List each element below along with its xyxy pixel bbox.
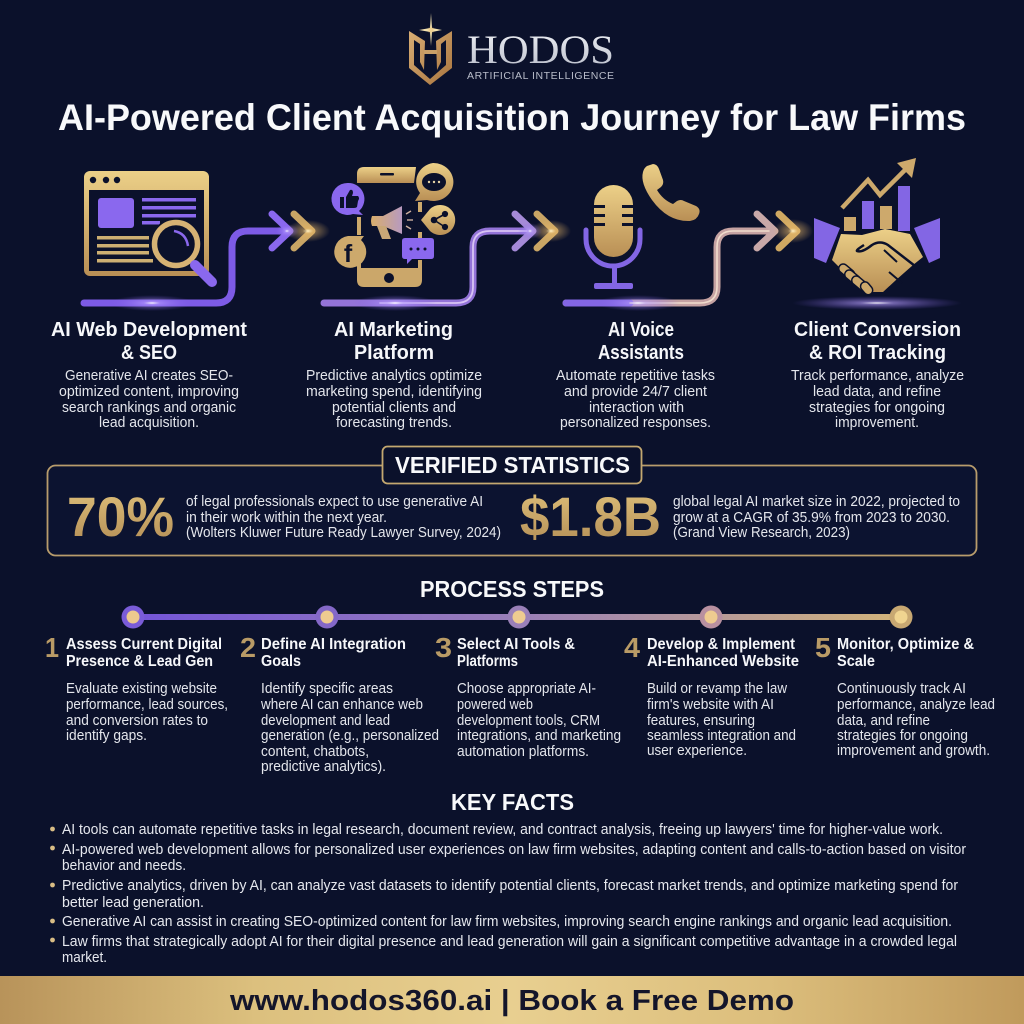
column 3 text: and provide 24/7 client: [564, 384, 707, 400]
step 4: [624, 632, 799, 759]
step 1: Evaluate existing website: [66, 681, 217, 697]
step 2: [240, 632, 439, 775]
stat $1.8B description: global legal AI market size in 2022, projected to: [673, 494, 960, 510]
icon: chat bubble: [415, 163, 453, 201]
step 2: Goals: [261, 653, 301, 670]
key facts list: market.: [62, 949, 107, 966]
step 5: improvement and growth.: [837, 743, 990, 759]
icon: handshake with growth chart: [792, 158, 962, 310]
icon: phone with social bubbles: [331, 163, 455, 287]
arrow 3: [566, 214, 813, 311]
footer banner: www.hodos360.ai | Book a Free Demo: [229, 985, 794, 1017]
step 1: Assess Current Digital: [66, 636, 222, 653]
footer banner: [0, 976, 1024, 1024]
step 2: content, chatbots,: [261, 744, 369, 760]
step 3: Select AI Tools &: [457, 636, 575, 653]
column 3 text: [556, 319, 715, 431]
panel: verified statistics: [48, 446, 976, 556]
logo wordmark: HODOS: [467, 27, 614, 72]
stat 70% description: in their work within the next year.: [186, 510, 387, 526]
step 1: identify gaps.: [66, 728, 147, 744]
stat $1.8B description: (Grand View Research, 2023): [673, 525, 850, 541]
key facts list: AI-powered web development allows for personalized user experiences on law firm websites, adapting content and calls-to-action based on visitor: [62, 841, 966, 858]
heading: key facts: KEY FACTS: [451, 789, 574, 815]
column 3 text: personalized responses.: [560, 415, 711, 431]
column 2 text: Platform: [354, 342, 434, 364]
key facts list: better lead generation.: [62, 894, 204, 911]
step 5: 5: [815, 632, 831, 663]
step 1: Presence & Lead Gen: [66, 653, 213, 670]
step 3: 3: [435, 632, 452, 663]
column 1 text: Generative AI creates SEO-: [65, 368, 233, 384]
key facts list: AI tools can automate repetitive tasks in legal research, document review, and contract analysis, freeing up lawyers' time for higher-value work.: [62, 821, 943, 838]
statistics heading: [382, 446, 642, 484]
step 1: [45, 632, 228, 744]
step 3: development tools, CRM: [457, 713, 600, 729]
step 2: development and lead: [261, 713, 390, 729]
logo tagline: ARTIFICIAL INTELLIGENCE: [467, 70, 614, 82]
column 1 text: & SEO: [121, 342, 177, 364]
step 2: 2: [240, 632, 256, 663]
column 4 text: & ROI Tracking: [809, 342, 946, 364]
icon: handset: [642, 164, 700, 221]
step 5: Scale: [837, 653, 875, 670]
step 4: firm's website with AI: [647, 697, 774, 713]
step 2: predictive analytics).: [261, 759, 386, 775]
column 2 text: marketing spend, identifying: [306, 384, 482, 400]
step 2: Define AI Integration: [261, 636, 406, 653]
key facts list: Generative AI can assist in creating SEO-optimized content for law firm websites, improving search engine rankings and organic lead acquisition.: [62, 913, 952, 930]
step 5: data, and refine: [837, 713, 930, 729]
icon: purple message: [402, 238, 434, 264]
arrow 2: [324, 214, 571, 311]
key facts list: behavior and needs.: [62, 857, 186, 874]
statistics heading: VERIFIED STATISTICS: [395, 452, 630, 478]
step 4: user experience.: [647, 743, 747, 759]
arrow 1: [84, 214, 330, 311]
column 3 text: interaction with: [589, 400, 684, 416]
stat: 70%: 70%: [67, 485, 174, 548]
stat 70% description: of legal professionals expect to use generative AI: [186, 494, 483, 510]
key facts list: Predictive analytics, driven by AI, can analyze vast datasets to identify potential clients, forecast market trends, and optimize marketing spend for: [62, 877, 958, 894]
logo: [409, 13, 614, 85]
icon: megaphone: [371, 206, 413, 239]
step 5: [815, 632, 995, 759]
process timeline: [122, 606, 912, 628]
step 4: Develop & Implement: [647, 636, 795, 653]
column 4 text: Client Conversion: [794, 319, 961, 341]
step 3: Platforms: [457, 653, 518, 670]
step 4: features, ensuring: [647, 713, 755, 729]
stat 70% description: [186, 494, 501, 541]
step 3: powered web: [457, 697, 533, 713]
key facts list: Law firms that strategically adopt AI for their digital presence and lead generation will gain a significant competitive advantage in a crowded legal: [62, 933, 957, 950]
step 4: 4: [624, 632, 640, 663]
step 2: where AI can enhance web: [260, 697, 423, 713]
stat $1.8B description: grow at a CAGR of 35.9% from 2023 to 2030.: [673, 510, 950, 526]
column 4 text: [791, 319, 964, 431]
step 4: seamless integration and: [647, 728, 796, 744]
heading: process steps: PROCESS STEPS: [420, 576, 604, 602]
step 4: Build or revamp the law: [647, 681, 787, 697]
step 2: generation (e.g., personalized: [261, 728, 439, 744]
step 1: and conversion rates to: [66, 713, 208, 729]
icon: facebook bubble: f: [344, 240, 353, 268]
column 2 text: forecasting trends.: [336, 415, 452, 431]
step 1: 1: [45, 632, 59, 663]
step 1: performance, lead sources,: [66, 697, 228, 713]
column 2 text: Predictive analytics optimize: [306, 368, 482, 384]
column 4 text: lead data, and refine: [813, 384, 941, 400]
icon: microphone and phone handset: [586, 164, 700, 289]
column 2 text: potential clients and: [332, 400, 456, 416]
column 3 text: Assistants: [598, 342, 684, 364]
step 2: Identify specific areas: [261, 681, 393, 697]
icon: share bubble: [421, 205, 455, 235]
step 5: strategies for ongoing: [837, 728, 968, 744]
step 5: Continuously track AI: [837, 681, 966, 697]
column 3 text: AI Voice: [608, 319, 674, 341]
step 3: [435, 632, 621, 760]
column 2 text: [306, 319, 482, 431]
icon: shield logo: [409, 13, 452, 85]
column 1 text: search rankings and organic: [62, 400, 236, 416]
key facts list: [50, 821, 966, 966]
column 2 text: AI Marketing: [334, 319, 453, 341]
title: AI-Powered Client Acquisition Journey for Law Firms: [58, 97, 966, 138]
icon: thumbs up bubble: [331, 183, 364, 215]
column 4 text: Track performance, analyze: [791, 368, 964, 384]
stat 70% description: (Wolters Kluwer Future Ready Lawyer Survey, 2024): [186, 525, 501, 541]
column 1 text: [51, 319, 247, 431]
icon: web page with magnifier: [84, 171, 212, 282]
stat $1.8B description: [673, 494, 960, 541]
step 4: AI-Enhanced Website: [647, 653, 799, 670]
column 4 text: improvement.: [835, 415, 919, 431]
step 3: integrations, and marketing: [457, 728, 621, 744]
step 3: automation platforms.: [457, 744, 589, 760]
step 3: Choose appropriate AI-: [457, 681, 596, 697]
stat: $1.8B: $1.8B: [520, 485, 661, 548]
column 1 text: optimized content, improving: [59, 384, 239, 400]
column 3 text: Automate repetitive tasks: [556, 368, 715, 384]
column 1 text: lead acquisition.: [99, 415, 199, 431]
column 1 text: AI Web Development: [51, 319, 247, 341]
column 4 text: strategies for ongoing: [809, 400, 945, 416]
step 5: Monitor, Optimize &: [837, 636, 974, 653]
step 5: performance, analyze lead: [837, 697, 995, 713]
